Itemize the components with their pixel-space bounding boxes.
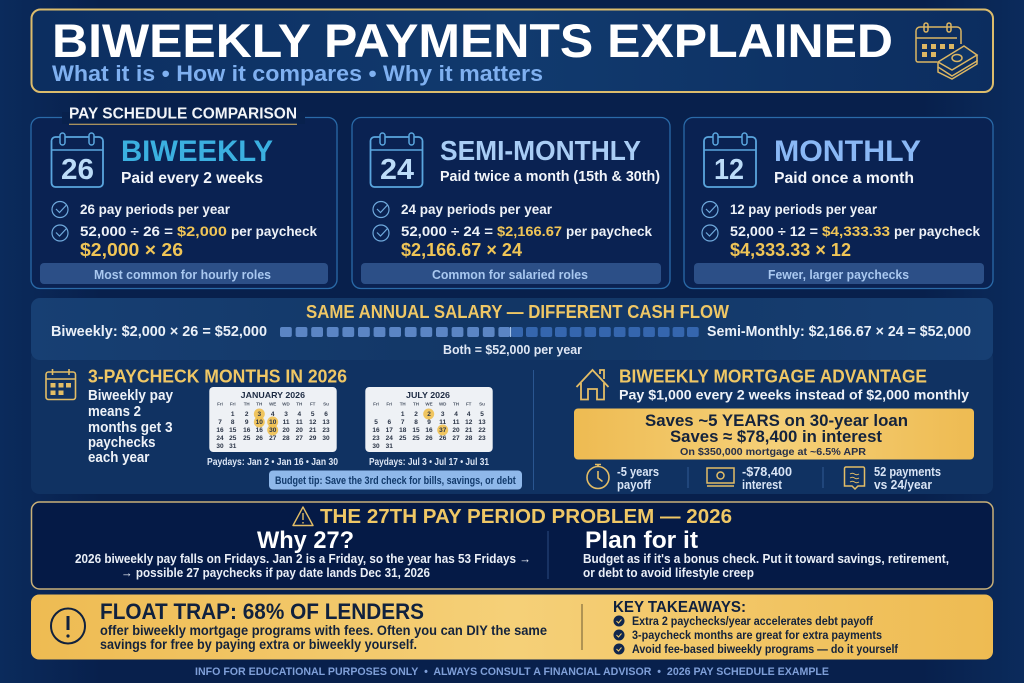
calendar: July 2026: Su [479, 402, 485, 406]
icon: calendar 12: 12 [714, 154, 744, 186]
calendar: January 2026: 30 [216, 443, 224, 450]
card title: BIWEEKLY [121, 135, 273, 168]
icon: warning [293, 507, 313, 526]
header banner [32, 10, 993, 92]
calendar: January 2026: 28 [282, 435, 290, 442]
why text: 2026 biweekly pay falls on Fridays. Jan 2 is a Friday, so the year has 53 Fridays → [75, 552, 531, 566]
calendar: July 2026: 26 [439, 435, 447, 442]
plan text: Budget as if it's a bonus check. Put it toward savings, retirement, [583, 552, 949, 566]
calendar: July 2026: 11 [439, 419, 447, 426]
card title: MONTHLY [774, 135, 921, 168]
icon: check [52, 202, 68, 218]
calendar: July 2026: 2 [414, 411, 418, 418]
calendar: January 2026: 1 [231, 411, 235, 418]
panel: lower comparison background [31, 350, 993, 494]
per paycheck formula: $2,000 [177, 224, 227, 239]
stat: interest: -$78,400 [742, 465, 792, 479]
calendar: January 2026: Su [323, 402, 329, 406]
total formula: $2,000 × 26 [80, 240, 183, 260]
calendar: January 2026: 8 [231, 419, 235, 426]
calendar: July 2026: 4 [454, 411, 458, 418]
pay periods: 26 pay periods per year [80, 202, 231, 217]
calendar: January 2026: Fri [230, 402, 236, 406]
band heading: SAME ANNUAL SALARY — DIFFERENT CASH FLOW [306, 302, 729, 322]
per paycheck formula: $4,333.33 [822, 224, 891, 239]
icon: calendar [46, 369, 76, 400]
calendar: January 2026: Fri [217, 402, 223, 406]
explanation text: Biweekly pay [88, 388, 173, 404]
float trap heading: FLOAT TRAP: 68% OF LENDERS [100, 599, 424, 624]
card subtitle: Paid every 2 weeks [121, 170, 263, 187]
calendar: January 2026: 30 [269, 427, 277, 434]
explanation text: paychecks [88, 435, 156, 451]
calendar: January 2026: 16 [216, 427, 224, 434]
calendar: July 2026: 25 [412, 435, 420, 442]
icon: check [52, 225, 68, 241]
icon: calendar and money [916, 23, 977, 79]
calendar: July 2026: 8 [414, 419, 418, 426]
calendar: July 2026: 37 [439, 427, 447, 434]
per paycheck formula: per paycheck [894, 224, 980, 239]
stat: payoff [587, 464, 659, 492]
calendar: January 2026: 12 [309, 419, 317, 426]
plan text [583, 552, 949, 580]
subtitle: What it is • How it compares • Why it matters [52, 61, 543, 86]
savings callout: Saves ~5 YEARS on 30-year loan [645, 411, 908, 430]
total formula: $4,333.33 × 12 [730, 240, 851, 260]
per paycheck formula [80, 224, 317, 239]
calendar: January 2026: 3 [284, 411, 288, 418]
stat: payments: 52 payments [874, 465, 941, 479]
calendar: January 2026: 20 [296, 427, 303, 434]
per paycheck formula: per paycheck [231, 224, 317, 239]
calendar: January 2026: 7 [218, 419, 222, 426]
calendar: July 2026: 2 [427, 411, 431, 418]
calendar: July 2026: 6 [387, 419, 391, 426]
note pill: Most common for hourly roles [94, 267, 271, 282]
per paycheck formula [730, 224, 980, 239]
explanation text: months get 3 [88, 420, 172, 436]
takeaways list: 3-paycheck months are great for extra payments [632, 628, 882, 642]
description: Pay $1,000 every 2 weeks instead of $2,000 monthly [619, 386, 969, 402]
float trap text: offer biweekly mortgage programs with fees. Often you can DIY the same [100, 623, 547, 638]
section label: pay schedule comparison: PAY SCHEDULE COMPARISON [69, 106, 297, 122]
stat: payments: vs 24/year [874, 478, 932, 492]
budget tip [269, 470, 522, 490]
calendar: January 2026: 25 [243, 435, 251, 442]
takeaways list: Extra 2 paychecks/year accelerates debt payoff [632, 614, 874, 628]
calendar: July 2026: 22 [478, 427, 486, 434]
explanation text: each year [88, 450, 150, 466]
calendar: July 2026: 27 [452, 435, 460, 442]
stat: payments [844, 465, 941, 492]
icon: calendar 26: 26 [61, 154, 94, 186]
note pill [361, 263, 661, 284]
calendar: January 2026: 11 [283, 419, 290, 426]
calendar: January 2026: WD [282, 402, 290, 406]
calendar: July 2026: WE [425, 402, 433, 406]
per paycheck formula: 52,000 ÷ 24 = [401, 224, 493, 239]
icon: check [702, 202, 718, 218]
stat: interest: interest [742, 478, 783, 492]
calendar: July 2026: 28 [465, 435, 473, 442]
takeaways heading: KEY TAKEAWAYS: [613, 599, 746, 616]
per paycheck formula: per paycheck [566, 224, 652, 239]
calendar: July 2026: 15 [412, 427, 420, 434]
title: BIWEEKLY PAYMENTS EXPLAINED [52, 14, 893, 67]
calendar: January 2026: 9 [245, 419, 249, 426]
calendar: July 2026: 23 [372, 435, 380, 442]
calendar: January 2026: JANUARY 2026 [241, 390, 305, 400]
icon: exclamation [51, 608, 85, 644]
heading: 3-PAYCHECK MONTHS IN 2026 [88, 366, 347, 386]
why heading: Why 27? [257, 527, 354, 554]
calendar: July 2026: 16 [372, 427, 380, 434]
icon: check [373, 225, 389, 241]
calendar: January 2026: 10 [256, 419, 263, 426]
calendar: January 2026: 11 [296, 419, 303, 426]
calendar: July 2026: FT [466, 402, 472, 406]
panel: monthly card [684, 118, 993, 288]
calendar: January 2026: 10 [269, 419, 277, 426]
calendar: January 2026: 27 [296, 435, 303, 442]
per paycheck formula [401, 224, 652, 239]
calendar: January 2026: WE [269, 402, 276, 406]
calendar: July 2026: 16 [425, 427, 433, 434]
cash flow bar [280, 327, 699, 337]
panel: 3-paycheck months [46, 366, 522, 490]
calendar: January 2026: 29 [309, 435, 317, 442]
panel: same annual salary band [31, 298, 993, 360]
calendar: January 2026: 24 [216, 435, 224, 442]
calendar: January 2026: 20 [282, 427, 290, 434]
stat: interest [707, 465, 792, 492]
calendar: July 2026: TH [400, 402, 406, 406]
plan heading: Plan for it [585, 527, 698, 554]
calendar: July 2026: 18 [399, 427, 407, 434]
calendar: July 2026: 5 [480, 411, 484, 418]
pay periods: 24 pay periods per year [401, 202, 553, 217]
per paycheck formula: 52,000 ÷ 12 = [730, 224, 818, 239]
icon: check [702, 225, 718, 241]
note pill: Fewer, larger paychecks [768, 267, 909, 282]
calendar: January 2026: FT [310, 402, 316, 406]
takeaways list: Avoid fee-based biweekly programs — do it yourself [632, 642, 899, 656]
panel: float trap and takeaways [31, 594, 993, 660]
both total: Both = $52,000 per year [443, 342, 582, 357]
card title: SEMI-MONTHLY [440, 135, 641, 166]
calendar: January 2026: 21 [309, 427, 317, 434]
calendar: January 2026: TH [296, 402, 302, 406]
calendar: January 2026: TH [256, 402, 262, 406]
calendar: July 2026: 1 [401, 411, 405, 418]
calendar: January 2026: 13 [322, 419, 330, 426]
calendar: July 2026: Fri [373, 402, 379, 406]
calendar: July 2026: Fri [386, 402, 392, 406]
total formula: $2,166.67 × 24 [401, 240, 522, 260]
explanation text [88, 388, 173, 466]
panel: biweekly card [31, 118, 337, 288]
calendar: January 2026: 25 [229, 435, 237, 442]
explanation text: means 2 [88, 404, 141, 420]
calendar: July 2026: 20 [452, 427, 460, 434]
calendar: July 2026: 9 [427, 419, 431, 426]
calendar: July 2026: 12 [465, 419, 473, 426]
calendar: July 2026: WD [439, 402, 447, 406]
stat: payoff: payoff [617, 478, 652, 492]
calendar: January 2026: 31 [229, 443, 237, 450]
calendar: July 2026: 13 [478, 419, 486, 426]
icon: check [373, 202, 389, 218]
heading: BIWEEKLY MORTGAGE ADVANTAGE [619, 366, 927, 386]
card subtitle: Paid twice a month (15th & 30th) [440, 169, 660, 185]
calendar: January 2026: 27 [269, 435, 277, 442]
note pill: Common for salaried roles [432, 267, 588, 282]
budget tip: Budget tip: Save the 3rd check for bills, savings, or debt [275, 475, 516, 487]
January paydays: Paydays: Jan 2 • Jan 16 • Jan 30 [207, 456, 338, 468]
takeaways list [614, 614, 899, 656]
savings callout: Saves ≈ $78,400 in interest [670, 427, 882, 446]
savings callout [574, 408, 974, 460]
icon: calendar 26 [52, 133, 103, 187]
calendar: July 2026: TH [453, 402, 459, 406]
stat: payoff: -5 years [617, 465, 659, 479]
panel: 27th pay period problem [32, 502, 993, 589]
calendar: July 2026: 30 [372, 443, 380, 450]
calendar: January 2026: 16 [256, 427, 263, 434]
icon: calendar 24 [370, 133, 423, 187]
card subtitle: Paid once a month [774, 170, 914, 187]
calendar: July 2026: 5 [374, 419, 378, 426]
calendar: July 2026: TH [413, 402, 419, 406]
why text [75, 552, 531, 580]
heading: THE 27TH PAY PERIOD PROBLEM — 2026 [320, 506, 732, 528]
calendar: January 2026: 4 [297, 411, 301, 418]
calendar: January 2026 [209, 387, 337, 452]
calendar: January 2026: 26 [256, 435, 263, 442]
calendar: January 2026: TH [244, 402, 250, 406]
calendar: January 2026: 15 [229, 427, 237, 434]
calendar: January 2026: 23 [322, 427, 330, 434]
calendar: July 2026: 26 [425, 435, 433, 442]
note pill [694, 263, 984, 284]
icon: calendar 24: 24 [380, 154, 414, 186]
calendar: July 2026: 23 [478, 435, 486, 442]
calendar: July 2026: 11 [453, 419, 460, 426]
per paycheck formula: 52,000 ÷ 26 = [80, 224, 173, 239]
icon: calendar 12 [704, 133, 756, 187]
calendar: January 2026: 2 [245, 411, 249, 418]
calendar: January 2026: 3 [257, 411, 261, 418]
calendar: July 2026: 21 [465, 427, 473, 434]
icon: house [576, 370, 608, 400]
float trap text [100, 623, 547, 652]
calendar: January 2026: 16 [243, 427, 251, 434]
savings callout: On $350,000 mortgage at ~6.5% APR [680, 446, 866, 458]
calendar: July 2026: 17 [386, 427, 393, 434]
calendar: January 2026: 4 [271, 411, 275, 418]
calendar: July 2026: 4 [467, 411, 471, 418]
float trap text: savings for free by paying extra or biweekly yourself. [100, 637, 417, 652]
panel: semi-monthly card [352, 118, 670, 288]
semi-monthly equation: Semi-Monthly: $2,166.67 × 24 = $52,000 [707, 324, 971, 340]
calendar: January 2026: 30 [322, 435, 330, 442]
why text: → possible 27 paychecks if pay date lands Dec 31, 2026 [121, 566, 430, 580]
biweekly equation: Biweekly: $2,000 × 26 = $52,000 [51, 324, 267, 340]
calendar: July 2026: 25 [399, 435, 407, 442]
calendar: January 2026: 5 [311, 411, 315, 418]
calendar: July 2026: 7 [401, 419, 405, 426]
note pill [40, 263, 328, 284]
panel: biweekly mortgage advantage [574, 366, 974, 492]
calendar: July 2026: 24 [386, 435, 393, 442]
calendar: July 2026 [365, 387, 493, 452]
pay periods: 12 pay periods per year [730, 202, 878, 217]
footer disclaimer: INFO FOR EDUCATIONAL PURPOSES ONLY • ALWAYS CONSULT A FINANCIAL ADVISOR • 2026 PAY SCHEDULE EXAMPLE [195, 666, 829, 678]
July paydays: Paydays: Jul 3 • Jul 17 • Jul 31 [369, 456, 489, 468]
per paycheck formula: $2,166.67 [497, 224, 562, 239]
calendar: July 2026: 3 [441, 411, 445, 418]
plan text: or debt to avoid lifestyle creep [583, 566, 754, 580]
calendar: July 2026: 31 [386, 443, 393, 450]
calendar: January 2026: 6 [324, 411, 328, 418]
calendar: July 2026: JULY 2026 [406, 390, 450, 400]
